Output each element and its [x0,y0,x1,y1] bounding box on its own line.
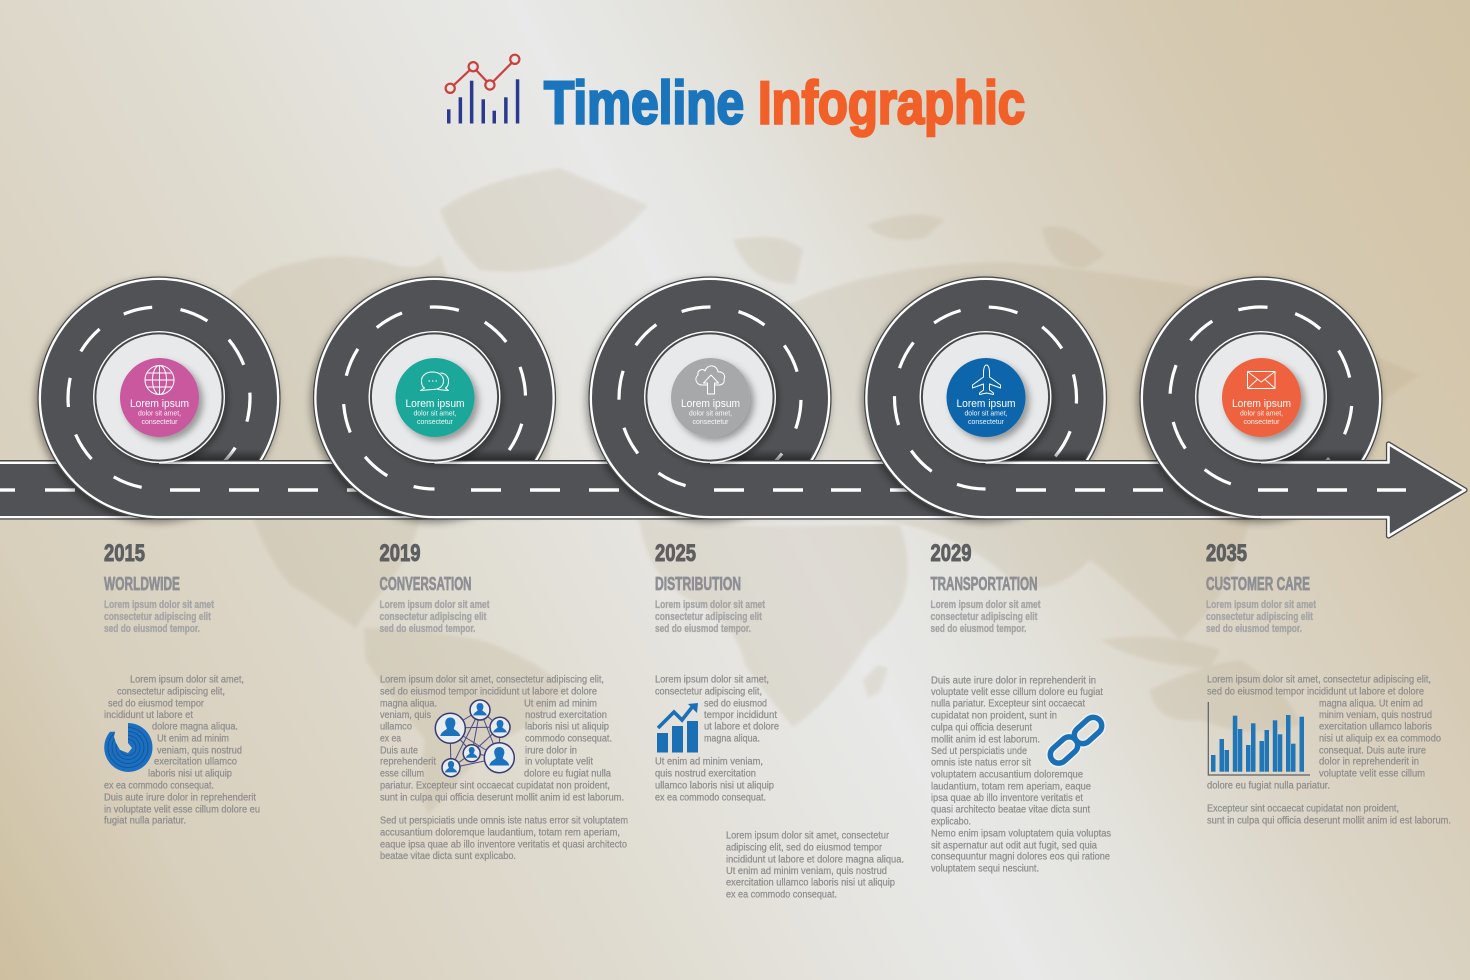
icon: globe [145,366,174,394]
heading block 2019: 2019 [380,540,420,567]
text block 2029: Duis aute irure dolor in reprehenderit in [931,676,1096,686]
hub 2015: worldwide [93,331,225,463]
hub 2019: conversation [368,331,500,463]
hub 2035: customer care [1195,331,1327,463]
hub 2035: customer care: Lorem ipsum [1232,398,1291,410]
text block 2025 lower: incididunt ut labore et dolore magna aliqua. [726,854,904,866]
heading block 2025: sed do eiusmod tempor. [655,623,751,635]
text block 2025 lower: Lorem ipsum dolor sit amet, consectetur [726,830,890,842]
hub 2035: customer care: consectetur [1244,417,1280,426]
text block 2015: Lorem ipsum dolor sit amet, [130,674,244,686]
road segment 2029 to 2035 [986,460,1261,520]
text block 2035: exercitation ullamco laboris [1319,722,1432,732]
heading block 2019 [380,540,490,635]
icon: chat bubbles [420,372,448,390]
text block 2019: eaque ipsa quae ab illo inventore veritatis et quasi architecto [380,840,627,850]
text block 2019: Sed ut perspiciatis unde omnis iste natus error sit voluptatem [380,816,628,826]
text block 2029: quasi architecto beatae vitae dicta sunt [931,804,1090,816]
text block 2025 lower: Ut enim ad minim veniam, quis nostrud [726,866,887,877]
text block 2019: ullamco [380,722,412,732]
hub 2029: transportation [920,331,1052,463]
text block 2025 lower: exercitation ullamco laboris nisi ut aliquip [726,878,895,888]
text block 2015: consectetur adipiscing elit, [117,686,225,698]
title second word: Infographic [758,70,1025,136]
heading block 2029: sed do eiusmod tempor. [930,623,1026,635]
text block 2025: Lorem ipsum dolor sit amet, [655,674,769,686]
arrow: road end [1258,444,1465,536]
text block 2015: ex ea commodo consequat. [104,780,214,792]
text block 2019: reprehenderit [380,756,436,768]
text block 2029: cupidatat non proident, sunt in [931,710,1057,722]
text block 2019: sed do eiusmod tempor incididunt ut labore et dolore [380,686,597,698]
text block 2029: voluptatem sequi nesciunt. [931,864,1039,874]
icon: growth bars with arrow [657,703,698,752]
text block 2035: sed do eiusmod tempor incididunt ut labore et dolore [1207,686,1424,698]
text block 2015: fugiat nulla pariatur. [104,816,186,826]
text block 2019: accusantium doloremque laudantium, totam rem aperiam, [380,828,620,838]
text block 2015: laboris nisi ut aliquip [148,768,232,780]
text block 2015: incididunt ut labore et [104,710,193,721]
text block 2025: ullamco laboris nisi ut aliquip [655,780,774,792]
text block 2019: esse cillum [380,768,424,780]
road loop 2025 [588,276,832,520]
hub 2025: distribution: consectetur [692,417,729,426]
road segment 2019 to 2025 [434,460,710,520]
text block 2029: Nemo enim ipsam voluptatem quia voluptas [931,828,1111,840]
hub 2015: worldwide: Lorem ipsum [130,398,189,410]
text block 2029: culpa qui officia deserunt [931,722,1032,734]
text block 2035: sunt in culpa qui officia deserunt mollit anim id est laborum. [1207,816,1451,826]
heading block 2025: 2025 [655,540,696,567]
text block 2019: ex ea [380,734,401,744]
text block 2029 [931,676,1111,874]
icon: envelope [1248,372,1275,388]
title [446,55,744,137]
heading block 2035: consectetur adipiscing elit [1206,611,1313,623]
hub 2025: distribution [644,331,776,463]
road loop 2015 [37,276,281,520]
heading block 2035 [1206,540,1316,635]
hub 2029: transportation: dolor sit amet, [964,408,1008,418]
road segment 2025 to 2029 [710,460,986,520]
text block 2015: Ut enim ad minim [157,734,229,744]
icon: chart with trend line [446,55,519,124]
heading block 2035: 2035 [1206,540,1247,567]
icon: cloud upload [696,366,725,394]
text block 2015: exercitation ullamco [154,756,237,768]
road loop 2019 [313,276,556,520]
text block 2015: veniam, quis nostrud [157,746,242,756]
text block 2029: nulla pariatur. Excepteur sint occaecat [931,698,1085,710]
text block 2029: ipsa quae ab illo inventore veritatis et [931,793,1083,804]
heading block 2025 [655,540,765,635]
hub 2019: conversation: consectetur [417,417,453,426]
icon: airplane [972,365,1000,394]
text block 2025 [655,674,779,804]
heading block 2019: consectetur adipiscing elit [380,611,487,623]
heading block 2019: sed do eiusmod tempor. [380,623,476,635]
text block 2025: consectetur adipiscing elit, [655,686,762,698]
icon: people network [435,700,514,777]
road loop 2029 [864,276,1107,520]
text block 2035: consequat. Duis aute irure [1319,746,1426,756]
text block 2035: magna aliqua. Ut enim ad [1319,698,1423,710]
heading block 2029: Lorem ipsum dolor sit amet [930,599,1041,611]
hub 2015: worldwide: dolor sit amet, [138,408,181,418]
text block 2019 [380,674,628,862]
title words: Timeline [544,70,744,136]
text block 2025: quis nostrud exercitation [655,768,756,780]
road segment 2015 to 2019 [159,460,434,520]
text block 2025 lower [726,830,904,900]
text block 2015 [104,674,260,826]
hub 2025: distribution: dolor sit amet, [689,408,732,418]
text block 2015: sed do eiusmod tempor [108,698,205,710]
heading block 2015: 2015 [104,540,145,567]
heading block 2029: TRANSPORTATION [930,573,1038,594]
icon: radial pie [104,723,152,772]
road loop 2035 [1139,276,1383,520]
hub 2029: transportation: Lorem ipsum [956,398,1016,410]
text block 2035: dolore eu fugiat nulla pariatur. [1207,780,1330,792]
text block 2019: Duis aute [380,746,418,756]
text block 2035: Lorem ipsum dolor sit amet, consectetur adipiscing elit, [1207,674,1431,686]
text block 2029: voluptate velit esse cillum dolore eu fugiat [931,687,1103,698]
text block 2035: minim veniam, quis nostrud [1319,710,1432,721]
hub 2025: distribution: Lorem ipsum [681,398,740,410]
text block 2025: ut labore et dolore [704,722,779,732]
hub 2035: customer care: dolor sit amet, [1240,408,1283,418]
hub 2019: conversation: Lorem ipsum [406,398,464,410]
heading block 2025: consectetur adipiscing elit [655,611,762,623]
world map [225,168,1420,815]
text block 2025: magna aliqua. [704,734,760,744]
text block 2035: nisi ut aliquip ex ea commodo [1319,734,1441,744]
text block 2025 lower: adipiscing elit, sed do eiusmod tempor [726,842,883,854]
hub 2015: worldwide: consectetur [142,417,178,426]
text block 2029: Sed ut perspiciatis unde [931,746,1027,757]
text block 2015: Duis aute irure dolor in reprehenderit [104,792,256,804]
text block 2019: in voluptate velit [525,756,593,768]
text block 2029: consequuntur magni dolores eos qui ratione [931,852,1110,862]
text block 2015: in voluptate velit esse cillum dolore eu [104,804,260,816]
hub 2019: conversation: dolor sit amet, [414,408,456,418]
heading block 2015: Lorem ipsum dolor sit amet [104,599,214,611]
text block 2029: laudantium, totam rem aperiam, eaque [931,782,1091,792]
text block 2019: magna aliqua. [380,698,437,710]
heading block 2035: CUSTOMER CARE [1206,573,1310,594]
heading block 2015: consectetur adipiscing elit [104,611,211,623]
text block 2029: voluptatem accusantium doloremque [931,770,1083,780]
hub 2029: transportation: consectetur [968,417,1004,426]
text block 2029: sit aspernatur aut odit aut fugit, sed quia [931,840,1097,852]
heading block 2019: Lorem ipsum dolor sit amet [380,599,490,611]
text block 2019: sunt in culpa qui officia deserunt mollit anim id est laborum. [380,792,624,804]
road segment: entry [0,460,170,520]
text block 2019: beatae vitae dicta sunt explicabo. [380,851,516,862]
text block 2035: Excepteur sint occaecat cupidatat non proident, [1207,804,1399,814]
text block 2025: ex ea commodo consequat. [655,792,766,804]
text block 2025 lower: ex ea commodo consequat. [726,890,837,900]
text block 2019: Lorem ipsum dolor sit amet, consectetur adipiscing elit, [380,674,604,686]
heading block 2035: sed do eiusmod tempor. [1206,623,1302,635]
text block 2019: nostrud exercitation [525,710,607,721]
text block 2029: mollit anim id est laborum. [931,734,1040,746]
text block 2019: veniam, quis [380,710,431,721]
text block 2035: dolor in reprehenderit in [1319,756,1419,768]
text block 2035: voluptate velit esse cillum [1319,768,1425,780]
heading block 2029: 2029 [930,540,972,567]
heading block 2025: Lorem ipsum dolor sit amet [655,599,765,611]
heading block 2015: sed do eiusmod tempor. [104,623,200,635]
bar chart [1208,702,1310,775]
text block 2015: dolore magna aliqua. [152,722,238,732]
text block 2029: omnis iste natus error sit [931,758,1031,768]
text block 2019: commodo consequat. [525,734,612,744]
text block 2019: Ut enim ad minim [524,698,597,710]
text block 2025: Ut enim ad minim veniam, [655,756,763,768]
heading block 2029: consectetur adipiscing elit [930,611,1038,623]
text block 2019: irure dolor in [525,746,577,756]
text block 2025: tempor incididunt [704,710,777,721]
text block 2019: pariatur. Excepteur sint occaecat cupidatat non proident, [380,780,610,792]
text block 2029: explicabo. [931,816,971,828]
text block 2025: sed do eiusmod [704,698,767,710]
text block 2019: dolore eu fugiat nulla [524,768,611,780]
heading block 2019: CONVERSATION [380,573,472,594]
text block 2035 [1207,674,1451,826]
text block 2019: laboris nisi ut aliquip [525,722,609,732]
heading block 2025: DISTRIBUTION [655,573,741,594]
heading block 2015: WORLDWIDE [104,573,180,594]
heading block 2029 [930,540,1041,635]
icon: chain link [1047,714,1105,767]
heading block 2035: Lorem ipsum dolor sit amet [1206,599,1316,611]
heading block 2015 [104,540,214,635]
